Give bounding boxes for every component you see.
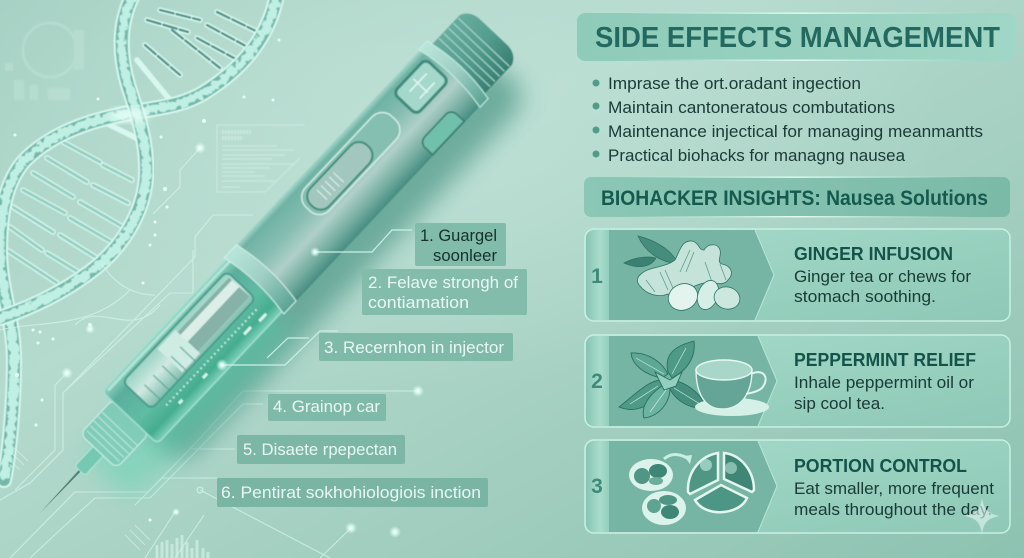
decorative nodes (61, 142, 424, 538)
card 1: ginger (585, 229, 1010, 321)
DNA crossing glow (110, 108, 150, 122)
info text panel (217, 125, 305, 192)
needle hub (62, 399, 149, 488)
watermark star (964, 498, 1000, 534)
bullet 3: Maintenance injectical for managing meanmantts (608, 123, 983, 141)
cartridge window (122, 271, 256, 409)
ring (419, 38, 491, 107)
card 3 text (794, 480, 994, 519)
label 2: 2. Felave strongh of (368, 274, 518, 292)
card 3 text: meals throughout the day. (794, 501, 992, 519)
label 2 (362, 269, 527, 315)
collar (224, 242, 299, 314)
label 2: contiamation (368, 294, 469, 312)
pen body (230, 42, 487, 308)
title: SIDE EFFECTS MANAGEMENT (595, 22, 1000, 54)
card 2 text: sip cool tea. (794, 395, 885, 413)
DNA helix (0, 0, 277, 480)
icon: mint and tea (619, 341, 769, 418)
label 3: 3. Recernhon in injector (324, 339, 505, 357)
card 3 heading: PORTION CONTROL (794, 455, 967, 476)
pen injector (9, 3, 546, 558)
card 2 heading: PEPPERMINT RELIEF (794, 349, 976, 370)
icon: ginger (624, 236, 742, 315)
circuit lines (0, 148, 418, 558)
scale dots (166, 307, 259, 405)
card 1 heading: GINGER INFUSION (794, 243, 953, 264)
dose markings (144, 347, 195, 399)
card 1: ginger: 1 (591, 265, 603, 288)
bullet 4: Practical biohacks for managng nausea (608, 147, 906, 165)
DNA strand right (0, 0, 277, 480)
label 4: 4. Grainop car (273, 398, 381, 416)
card 3: portion control (585, 440, 1010, 533)
label 3 (319, 333, 513, 361)
label 5: 5. Disaete rpepectan (243, 441, 397, 459)
title panel (577, 12, 1015, 61)
card 3 text: Eat smaller, more frequent (794, 480, 994, 498)
DNA strand left (0, 0, 146, 318)
label 1 (415, 223, 506, 266)
card 1 text: Ginger tea or chews for (794, 268, 972, 286)
faint data dial top left (5, 23, 84, 100)
label 1: 1. Guargel (420, 227, 497, 245)
bottom chart decoration (4, 446, 208, 558)
card 2 text (794, 374, 975, 413)
bullet 2: Maintain cantoneratous combutations (608, 99, 895, 117)
card 2: peppermint: 2 (591, 370, 603, 393)
pen shadow (139, 57, 531, 468)
cartridge glow (81, 281, 296, 503)
DNA rungs (7, 10, 260, 283)
card 2 text: Inhale peppermint oil or (794, 374, 975, 392)
dose window (393, 59, 449, 115)
card 3: portion control: 3 (591, 475, 603, 498)
label 5 (237, 435, 405, 464)
label connectors (216, 230, 412, 371)
label 6 (217, 478, 488, 507)
side clip (419, 109, 464, 155)
callout labels (217, 223, 527, 507)
plunger (177, 277, 249, 352)
label 6: 6. Pentirat sokhohiologiois inction (221, 484, 481, 502)
subheading panel: BIOHACKER INSIGHTS: Nausea Solutions (601, 187, 988, 210)
card 1 text: stomach soothing. (794, 288, 936, 306)
label 4 (268, 394, 386, 421)
bullet list (592, 75, 983, 165)
label 1: soonleer (433, 247, 498, 265)
slider button (296, 107, 406, 220)
bullet 1: Imprase the ort.oradant ingection (608, 75, 861, 93)
card 2: peppermint (585, 335, 1010, 427)
sparkle particles (14, 38, 280, 522)
subheading panel (584, 176, 1010, 217)
glass cartridge (102, 253, 288, 444)
needle (39, 469, 82, 514)
icon: plates (629, 453, 754, 525)
tea cup (695, 398, 769, 416)
card 1 text (794, 268, 972, 306)
dial knob (429, 7, 520, 97)
